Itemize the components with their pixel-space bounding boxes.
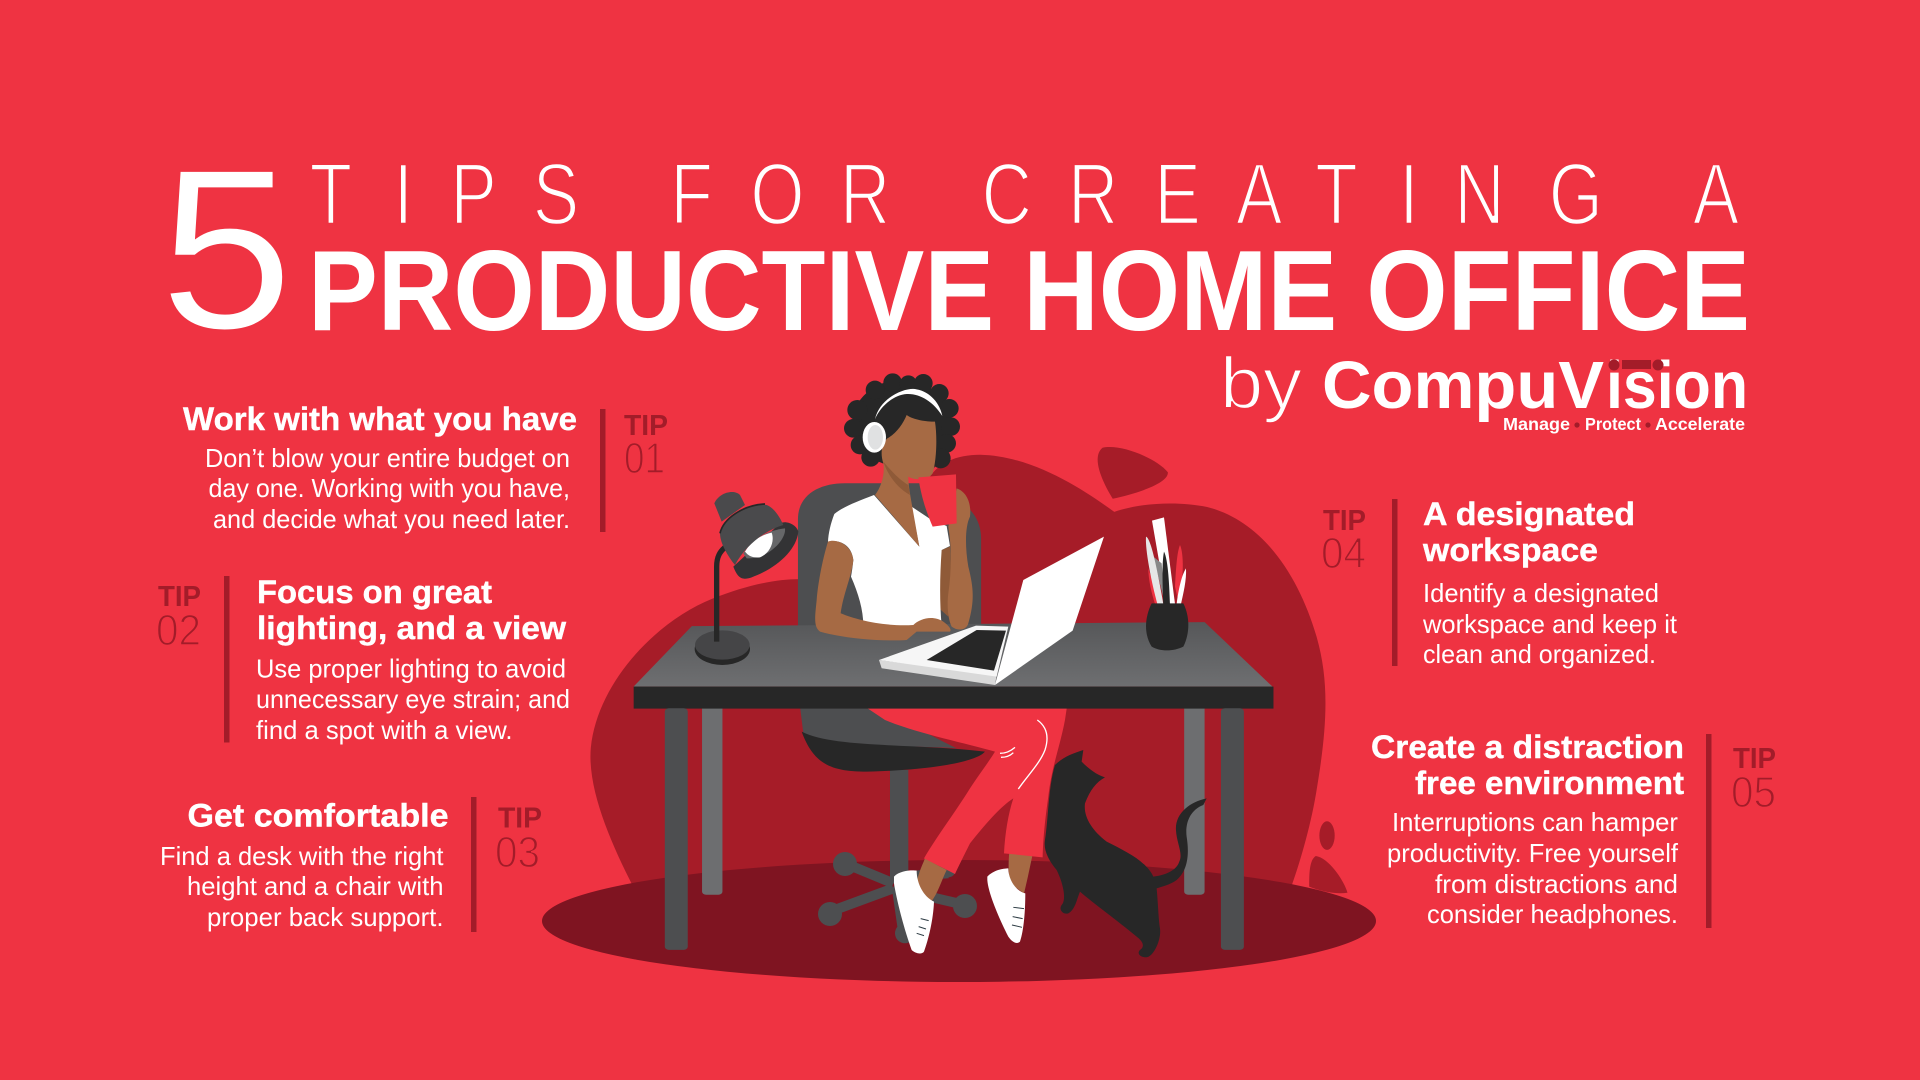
body text: Find a desk with the right xyxy=(160,841,444,871)
floor shadow xyxy=(542,860,1376,982)
tip number: 05 xyxy=(1731,768,1776,817)
tip number: 04 xyxy=(1321,529,1366,578)
CompuVision wordmark: CompuV xyxy=(1322,348,1604,423)
divider xyxy=(1706,734,1712,928)
hair xyxy=(844,373,960,471)
body text: find a spot with a view. xyxy=(256,715,512,745)
lamp inner xyxy=(743,528,785,558)
heading: A designated xyxy=(1423,496,1635,532)
body text: Use proper lighting to avoid xyxy=(256,654,566,684)
heading: Work with what you have xyxy=(183,401,577,437)
person: upper body xyxy=(815,373,973,640)
body text xyxy=(1422,578,1678,669)
body text xyxy=(160,841,444,932)
body text: productivity. Free yourself xyxy=(1387,838,1679,868)
laptop keyboard xyxy=(927,630,1006,671)
holder cup xyxy=(1146,603,1188,650)
body text: Don’t blow your entire budget on xyxy=(205,443,570,473)
tagline: Protect xyxy=(1585,414,1641,434)
divider xyxy=(1392,499,1398,666)
tip 04 xyxy=(1321,496,1678,669)
tip number: 02 xyxy=(156,606,201,655)
lamp xyxy=(695,492,798,665)
lamp stem xyxy=(717,547,725,642)
CompuVision wordmark: ision xyxy=(1606,348,1748,423)
chair back xyxy=(798,483,981,629)
heading: workspace xyxy=(1422,532,1598,568)
chair seat xyxy=(800,707,985,772)
body text xyxy=(205,443,570,534)
body text xyxy=(1387,807,1679,929)
tagline: Manage xyxy=(1503,414,1570,434)
heading: Get comfortable xyxy=(188,798,448,834)
body text xyxy=(256,654,570,745)
desk front legs xyxy=(665,708,1244,950)
body text: from distractions and xyxy=(1435,869,1678,899)
divider xyxy=(471,797,476,932)
big numeral 5: 5 xyxy=(160,123,293,377)
heading xyxy=(257,574,566,646)
laptop xyxy=(879,537,1104,685)
tagline xyxy=(1503,414,1745,434)
heading: Focus on great xyxy=(257,574,492,610)
body text: Interruptions can hamper xyxy=(1392,807,1678,837)
pencil holder xyxy=(1146,517,1188,650)
tip label: TIP xyxy=(158,581,201,613)
heading xyxy=(1422,496,1635,568)
desk back legs xyxy=(702,703,1205,895)
shoes xyxy=(894,868,1025,953)
ear cup xyxy=(863,422,886,453)
ankles xyxy=(917,852,1032,903)
lamp shade xyxy=(720,505,783,565)
trouser crease lines xyxy=(1000,720,1047,789)
desk front edge xyxy=(634,687,1273,709)
tip label: TIP xyxy=(1733,743,1776,775)
body text: unnecessary eye strain; and xyxy=(256,684,570,714)
lamp seam xyxy=(720,504,765,533)
lamp base xyxy=(695,633,750,665)
laptop base xyxy=(879,660,997,685)
forearm and arm xyxy=(815,541,951,640)
body text: height and a chair with xyxy=(187,871,444,901)
tip label: TIP xyxy=(1323,505,1366,537)
body text: consider headphones. xyxy=(1427,899,1678,929)
heading: lighting, and a view xyxy=(257,610,566,646)
body text: proper back support. xyxy=(207,902,444,932)
desk xyxy=(634,622,1273,950)
cat xyxy=(1045,750,1207,957)
title line 2: PRODUCTIVE HOME OFFICE xyxy=(308,228,1750,355)
pens xyxy=(1148,568,1159,604)
logo mark above i xyxy=(1608,360,1664,370)
tip 01 xyxy=(183,401,668,534)
trousers xyxy=(865,707,1067,874)
body text: Identify a designated xyxy=(1423,578,1659,608)
person: legs and shoes xyxy=(865,707,1067,953)
background blob xyxy=(590,447,1347,893)
red mug xyxy=(918,474,957,527)
divider xyxy=(600,409,606,532)
tip number: 03 xyxy=(495,828,540,877)
laces xyxy=(917,907,1024,936)
tagline: Accelerate xyxy=(1655,414,1745,434)
tip label: TIP xyxy=(624,410,668,442)
tip 03 xyxy=(160,797,542,932)
tip 05 xyxy=(1371,729,1776,929)
shirt xyxy=(828,495,950,626)
body text: day one. Working with you have, xyxy=(208,473,570,503)
heading: Create a distraction xyxy=(1371,729,1684,765)
title xyxy=(160,123,1750,377)
CompuVision wordmark xyxy=(1322,348,1748,423)
lamp bulb xyxy=(745,533,773,558)
laptop lid xyxy=(995,537,1104,685)
face and neck xyxy=(875,415,936,547)
by: by xyxy=(1220,344,1302,424)
tip 02 xyxy=(156,574,570,745)
chair base xyxy=(818,770,977,943)
heading xyxy=(1371,729,1684,801)
heading: free environment xyxy=(1415,765,1684,801)
desk top xyxy=(634,622,1272,687)
body text: clean and organized. xyxy=(1423,639,1656,669)
headband xyxy=(875,389,942,419)
divider xyxy=(224,576,230,742)
lamp neck xyxy=(714,492,745,522)
tip number: 01 xyxy=(624,434,665,483)
body text: workspace and keep it xyxy=(1422,609,1678,639)
body text: and decide what you need later. xyxy=(213,504,570,534)
logo: by CompuVision xyxy=(1220,344,1748,434)
lamp rim xyxy=(733,522,798,579)
back arm xyxy=(932,547,951,617)
illustration: home office scene xyxy=(542,373,1376,982)
tip label: TIP xyxy=(498,802,542,834)
title line 1: TIPS FOR CREATING A xyxy=(310,146,1740,243)
neck shadow xyxy=(883,462,910,495)
